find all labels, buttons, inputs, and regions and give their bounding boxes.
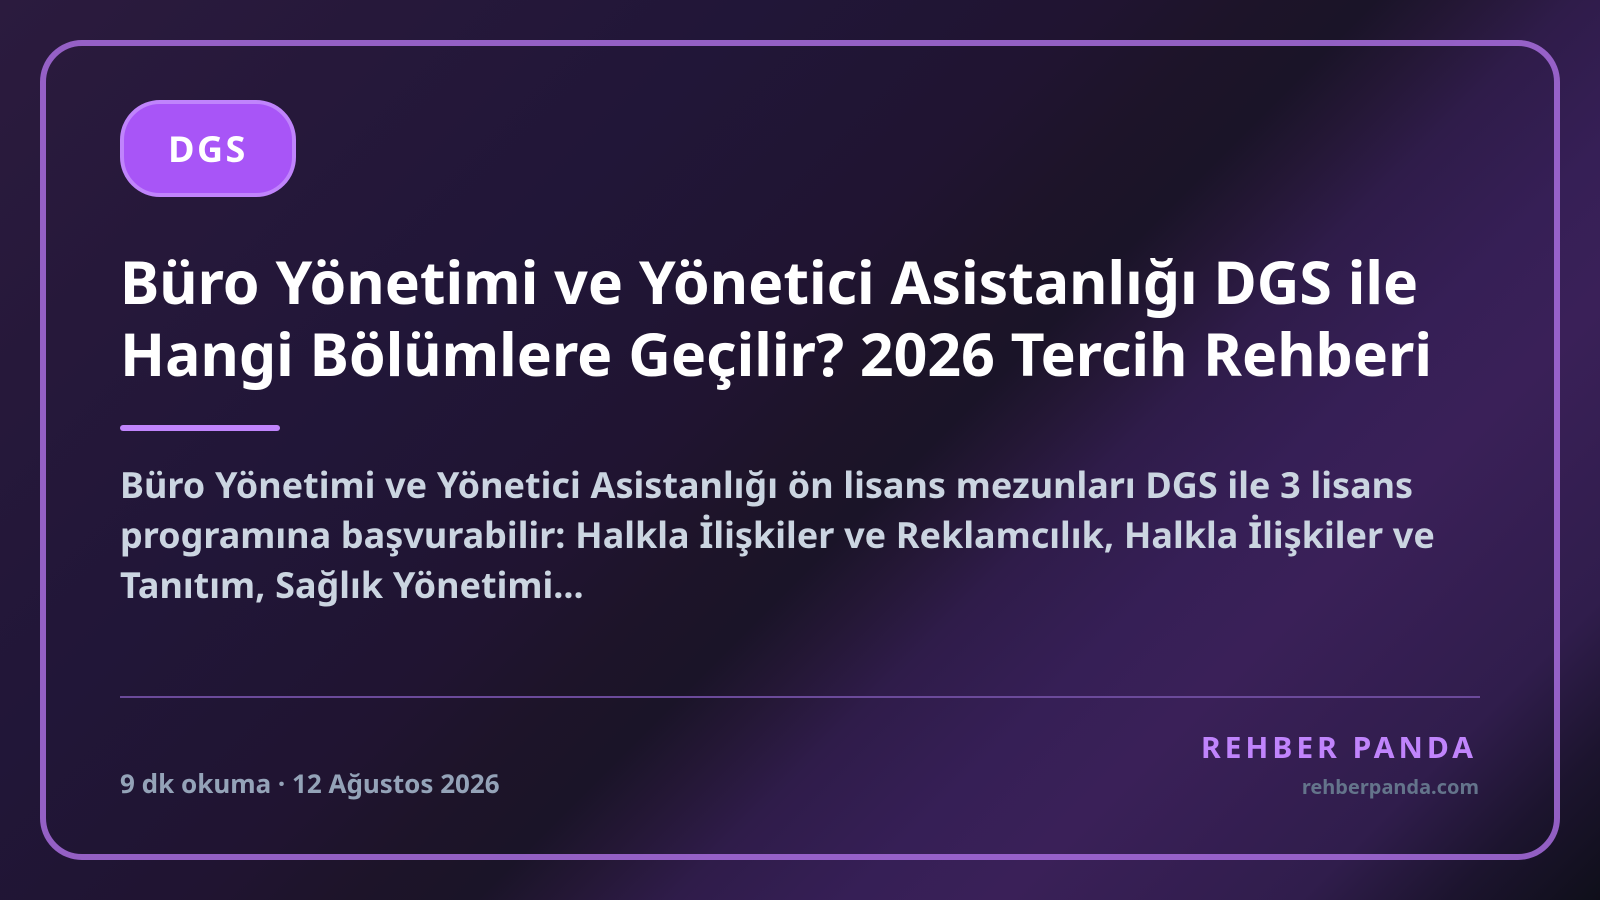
footer divider [120,696,1480,698]
brand name: REHBER PANDA [1201,726,1477,767]
title [120,242,1432,394]
reading time and date: 9 dk okuma · 12 Ağustos 2026 [120,765,500,801]
brand block [1201,726,1479,800]
title: Hangi Bölümlere Geçilir? 2026 Tercih Rehberi [120,314,1432,394]
summary text: Tanıtım, Sağlık Yönetimi... [120,560,584,609]
badge: DGS [120,100,296,197]
title: Büro Yönetimi ve Yönetici Asistanlığı DGS ile [120,242,1418,322]
badge: DGS: DGS [168,124,248,173]
accent underline [120,425,280,431]
summary text: Büro Yönetimi ve Yönetici Asistanlığı ön lisans mezunları DGS ile 3 lisans [120,460,1413,509]
summary text: programına başvurabilir: Halkla İlişkiler ve Reklamcılık, Halkla İlişkiler ve [120,510,1435,559]
summary text [120,460,1435,609]
brand url: rehberpanda.com [1302,773,1479,800]
